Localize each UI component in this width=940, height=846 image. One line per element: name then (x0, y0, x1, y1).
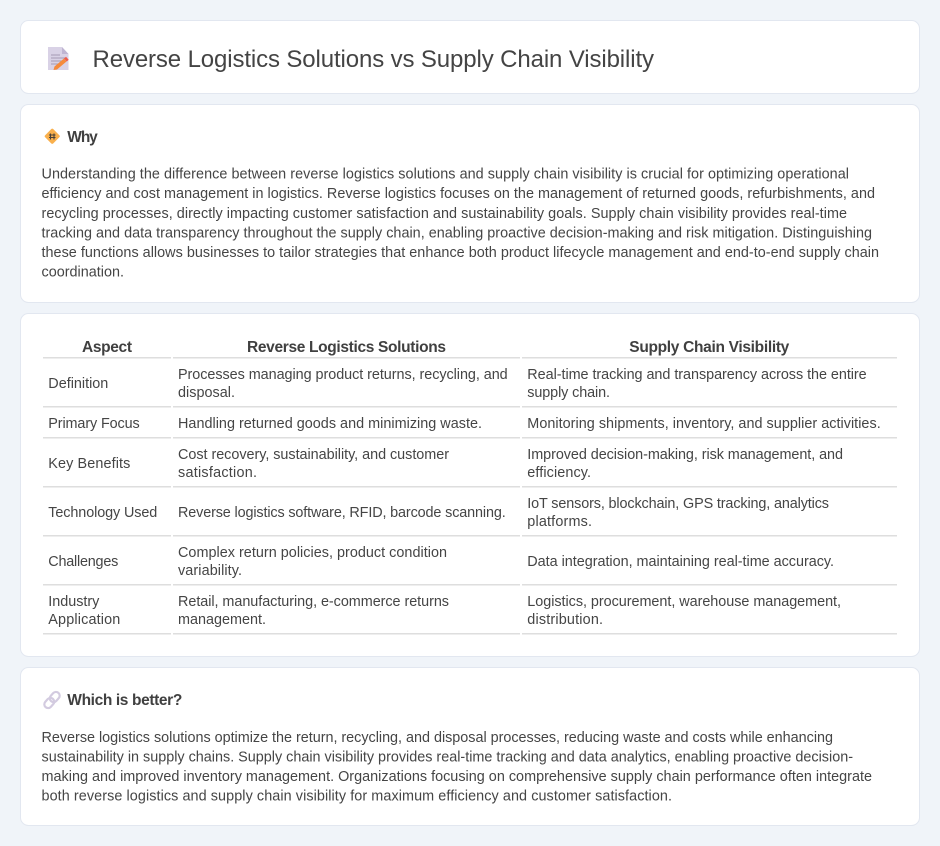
table row: key benefits (43, 447, 897, 488)
text block: why paragraph: Understanding the difference between reverse logistics solutions and supply chain visibility is crucial for optimizing operational (42, 166, 849, 182)
table row: technology used: Reverse logistics software, RFID, barcode scanning. (178, 505, 506, 521)
table row: primary focus (43, 416, 897, 438)
icon: diamond sign (44, 128, 60, 144)
table row: primary focus: Monitoring shipments, inventory, and supplier activities. (527, 416, 881, 432)
table row: key benefits: Cost recovery, sustainability, and customer (178, 447, 449, 463)
table row: industry application (43, 594, 897, 634)
text block: which is better paragraph: sustainability in supply chains. Supply chain visibility provides real-time tracking and data analytics, enabling proactive decision- (42, 750, 853, 766)
text block: which is better paragraph: making and improved inventory management. Organizations focusing on comprehensive supply chain performance often integrate (42, 769, 872, 785)
table row: challenges: Challenges (48, 554, 118, 570)
panel: comparison table (20, 314, 920, 656)
panel: title header (20, 20, 920, 94)
text block: which is better paragraph: Reverse logistics solutions optimize the return, recycling, and disposal processes, reducing waste and costs while enhancing (42, 730, 833, 746)
table row: primary focus: Handling returned goods and minimizing waste. (178, 416, 482, 432)
text block: why paragraph: these functions allows businesses to tailor strategies that enhance both product lifecycle management and end-to-end supply chain (42, 245, 879, 261)
table row: key benefits: satisfaction. (178, 465, 257, 481)
table header row: Reverse Logistics Solutions (247, 339, 446, 356)
table row: definition: supply chain. (527, 385, 610, 401)
table row: industry application: distribution. (527, 612, 603, 628)
table row: primary focus: Primary Focus (48, 416, 140, 432)
icon: chain link (43, 690, 61, 710)
table row: industry application: Logistics, procurement, warehouse management, (527, 594, 841, 610)
text block: why paragraph: coordination. (42, 264, 124, 280)
table header row: Aspect (82, 339, 132, 356)
table row: industry application: Retail, manufacturing, e-commerce returns (178, 594, 449, 610)
table row: industry application: management. (178, 612, 266, 628)
table row: technology used (43, 496, 897, 536)
panel: which is better (20, 668, 920, 826)
text block: why paragraph: efficiency and cost management in logistics. Reverse logistics focuses on the management of returned goods, refurbishments, and (42, 186, 875, 202)
table row: industry application: Application (48, 612, 120, 628)
heading: which is better: Which is better? (67, 692, 182, 709)
panel: why (20, 104, 920, 302)
table row: challenges: Complex return policies, product condition (178, 545, 447, 561)
table row: definition: disposal. (178, 385, 235, 401)
text block: why paragraph: recycling processes, directly impacting customer satisfaction and sustainability goals. Supply chain visibility provides real-time (42, 206, 847, 222)
table row: challenges: variability. (178, 563, 242, 579)
table row: technology used: IoT sensors, blockchain, GPS tracking, analytics (527, 496, 829, 512)
table header row: Supply Chain Visibility (629, 339, 790, 356)
table row: key benefits: Improved decision-making, risk management, and (527, 447, 843, 463)
table header row (43, 339, 897, 358)
table row: technology used: Technology Used (48, 505, 157, 521)
table row: challenges (43, 545, 897, 586)
table row: definition (43, 367, 897, 408)
table row: key benefits: efficiency. (527, 465, 591, 481)
text block: why paragraph (42, 166, 879, 280)
table row: definition: Processes managing product returns, recycling, and (178, 367, 508, 383)
table row: technology used: platforms. (527, 514, 592, 530)
icon: document with pencil (48, 47, 69, 70)
text block: why paragraph: tracking and data transparency throughout the supply chain, enabling proactive decision-making and risk mitigation. Distinguishing (42, 226, 872, 242)
table row: industry application: Industry (48, 594, 100, 610)
table row: key benefits: Key Benefits (48, 456, 130, 472)
text block: which is better paragraph: both reverse logistics and supply chain visibility for maximum efficiency and customer satisfaction. (42, 788, 672, 804)
table row: definition: Definition (48, 376, 108, 392)
heading: why: Why (67, 129, 98, 146)
table row: definition: Real-time tracking and transparency across the entire (527, 367, 867, 383)
title: Reverse Logistics Solutions vs Supply Chain Visibility (92, 46, 654, 73)
table row: challenges: Data integration, maintaining real-time accuracy. (527, 554, 834, 570)
text block: which is better paragraph (42, 730, 872, 804)
